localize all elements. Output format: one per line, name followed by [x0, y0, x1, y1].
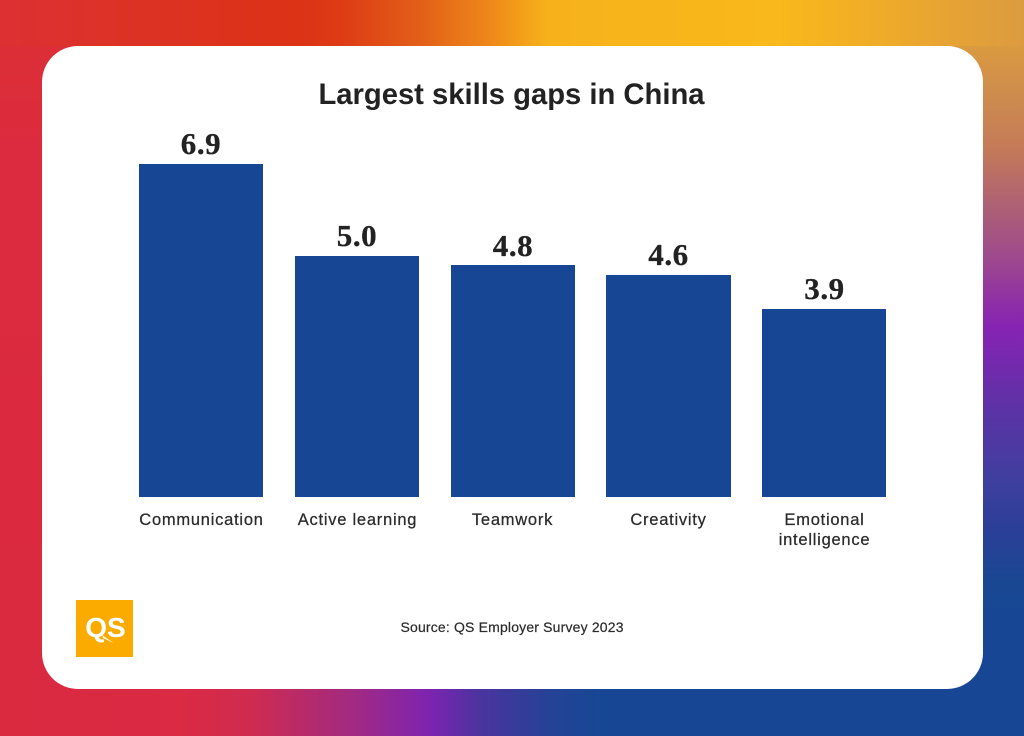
bar: Teamwork: 4.8: [493, 228, 533, 263]
source note: Source: QS Employer Survey 2023: [400, 619, 624, 635]
bar: Emotional intelligence: 3.9: [804, 271, 845, 306]
bar: Teamwork: Teamwork: [472, 511, 553, 529]
bar: Active learning: Active learning: [298, 511, 417, 529]
bar: Communication: Communication: [139, 511, 264, 529]
bar: Communication: 6.9: [181, 126, 221, 161]
logo text: QS: [85, 612, 126, 642]
bar: Active learning: [295, 218, 419, 529]
bar: Creativity: 4.6: [648, 237, 689, 272]
QS logo: [76, 600, 133, 657]
bar: Creativity: Creativity: [630, 511, 707, 529]
bar: Active learning: 5.0: [337, 218, 377, 253]
bar: Creativity: [606, 237, 731, 529]
title: Largest skills gaps in China: [318, 78, 705, 110]
bar: Emotional intelligence: [762, 271, 886, 549]
bar chart: [139, 126, 886, 549]
bar: Communication: [139, 126, 264, 529]
bar: Emotional intelligence: intelligence: [779, 530, 870, 548]
logo tail: [102, 635, 114, 643]
bar: Emotional intelligence: Emotional: [784, 511, 865, 529]
bar: Teamwork: [451, 228, 575, 529]
